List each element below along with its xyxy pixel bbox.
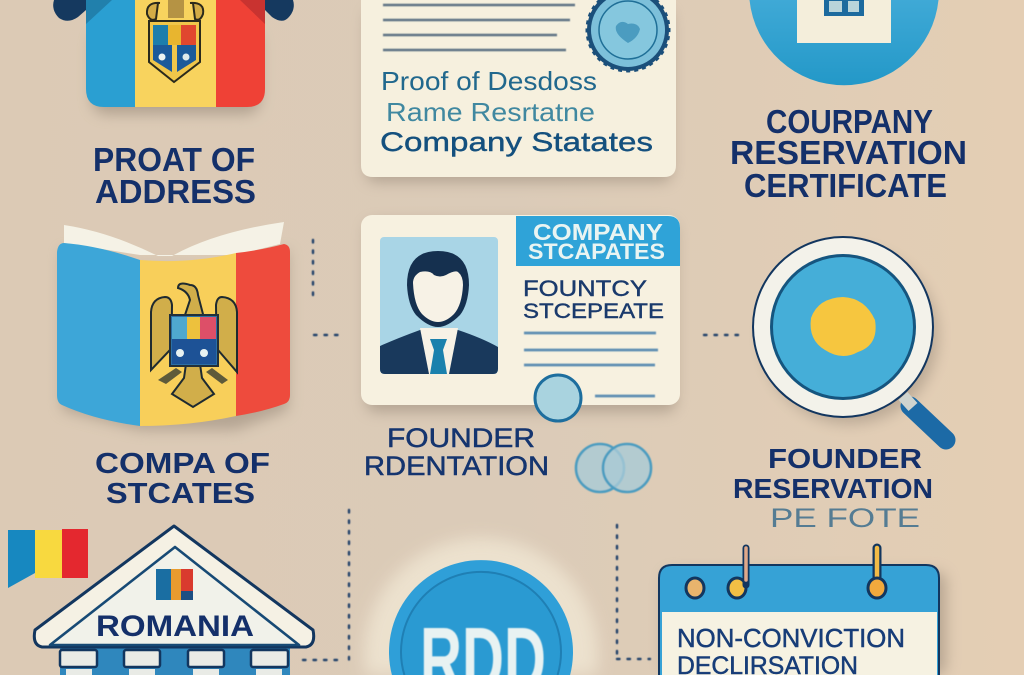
heading: founder reservation: FOUNDER [768,443,922,474]
heading: founder identification: RDENTATION [364,451,549,481]
panel: certificate document [361,0,676,182]
panel: company reservation certificate [730,0,967,204]
icon: coat of arms [147,0,203,82]
heading: proof of address: ADDRESS [95,173,256,210]
icon: building crest [156,569,193,600]
text block: certificate text: Proof of Desdoss [381,66,597,96]
text block: certificate text [380,66,653,157]
icon: blue circle with document [750,0,938,85]
icon: portrait photo [380,237,498,374]
text block: declaration: NON-CONVICTION [677,623,905,653]
heading: company of statutes: STCATES [106,478,255,510]
heading: founder identification: FOUNDER [387,423,535,453]
heading: founder reservation: PE FOTE [770,503,920,533]
document lines [383,5,575,50]
text block: card header: COMPANY [533,219,663,245]
label: Romania: ROMANIA [96,610,254,643]
heading: founder reservation [733,443,933,533]
icon: Romanian flag [8,529,88,588]
text block: declaration [677,623,905,675]
heading: company reservation certificate: CERTIFICATE [744,167,947,204]
columns [60,650,288,667]
heading: company reservation certificate [730,103,967,204]
heading: proof of address [93,141,256,210]
icon: flag book [57,222,290,430]
connector: dotted lines [303,240,738,660]
panel: Romania institution [8,526,314,675]
panel: company statutes [57,222,290,510]
icon: seal [587,0,669,71]
icon: overlapping circles [576,444,651,492]
icon: card stamp [535,375,581,421]
icon: magnifying glass [752,236,946,440]
text block: card header [528,219,665,264]
heading: company reservation certificate: COURPANY [766,103,933,140]
heading: founder identification [364,423,549,481]
heading: company of statutes: COMPA OF [95,448,270,480]
heading: founder reservation: RESERVATION [733,473,933,504]
icon: eagle emblem [151,284,237,407]
text block: certificate text: Rame Resrtatne [386,97,595,127]
text block: card title [523,276,664,323]
panel: founder reservation [733,236,946,533]
panel: non-conviction declaration [658,548,946,675]
panel: RDD badge [364,538,598,675]
icon: calendar pins [686,548,886,598]
text block: card title: STCEPEATE [523,300,664,323]
icon: building [34,526,314,675]
heading: company of statutes [95,448,270,510]
heading: company reservation certificate: RESERVATION [730,134,967,171]
text block: card title: FOUNTCY [523,276,647,301]
panel: proof of address [53,0,294,210]
card lines [524,333,658,396]
text block: certificate text: Company Statates [380,127,653,157]
heading: proof of address: PROAT OF [93,141,255,178]
panel: founder identification card [361,215,680,492]
text block: card header: STCAPATES [528,239,665,264]
icon: house flag [53,0,294,114]
